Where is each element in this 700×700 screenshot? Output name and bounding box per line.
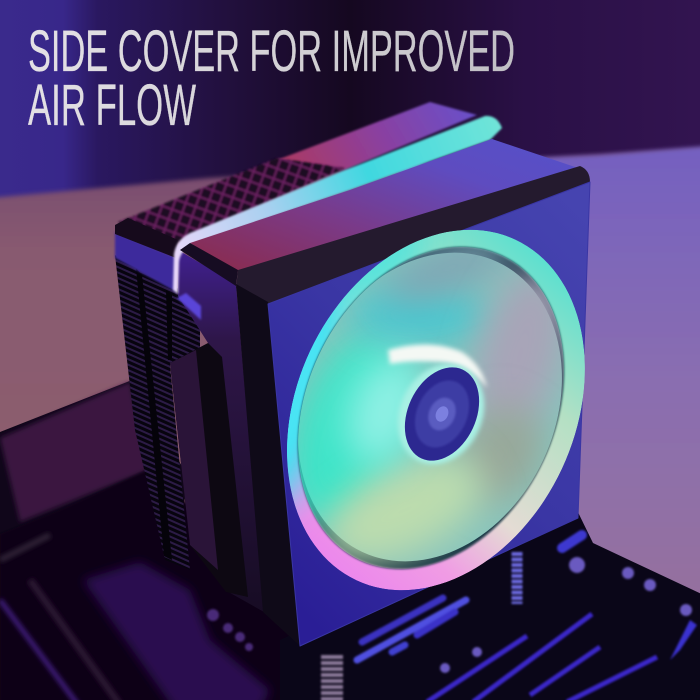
RGB fan	[287, 230, 585, 590]
cooler side wall	[178, 250, 264, 612]
board heatsink parts	[357, 535, 582, 660]
cooler top edge	[115, 218, 178, 258]
screw left	[321, 655, 343, 700]
front panel	[268, 182, 590, 646]
board traces	[0, 535, 120, 700]
fan cover top plate	[190, 139, 578, 272]
title	[28, 19, 515, 138]
fan cavity shadow	[248, 203, 614, 613]
fan blades	[298, 247, 564, 569]
light strip	[173, 116, 502, 294]
cooler side fins	[115, 232, 264, 612]
heatsink top rear plate	[277, 102, 477, 170]
blade highlight	[388, 344, 487, 388]
ring	[287, 230, 585, 590]
board beads	[207, 609, 253, 651]
screw right	[512, 552, 522, 604]
fan cover frame	[180, 166, 590, 646]
motherboard	[0, 380, 700, 700]
memory slots	[427, 614, 657, 700]
heatsink top mesh	[118, 158, 345, 250]
board dark block	[83, 562, 270, 700]
title: AIR FLOW	[28, 73, 196, 138]
hub	[382, 350, 500, 478]
capacitors	[440, 557, 692, 673]
side cover bracket	[170, 343, 248, 597]
